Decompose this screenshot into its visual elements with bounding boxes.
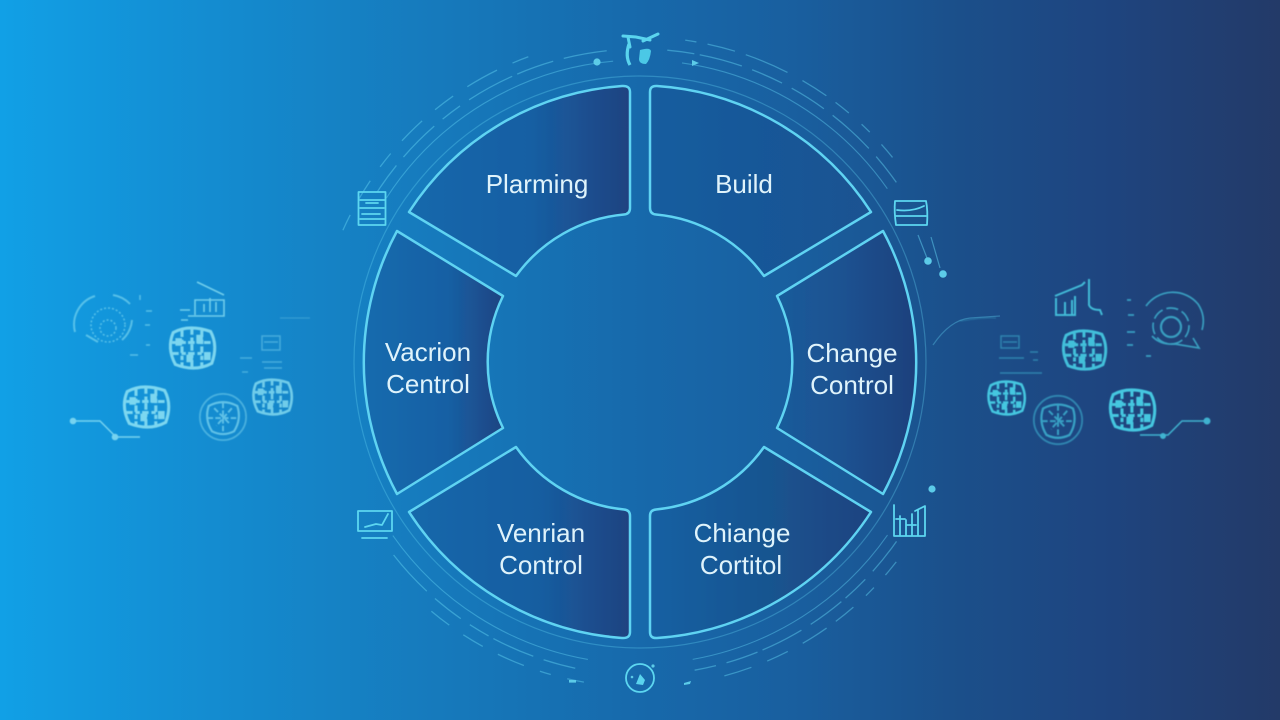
icon: document, upper left — [358, 192, 386, 225]
label: right Change Control: Control — [810, 370, 894, 400]
panel: bottom Change Control — [650, 447, 871, 638]
connector with dots — [1140, 418, 1210, 438]
label: left Version Control: Vacrion — [385, 337, 471, 367]
icon: head circle — [1034, 396, 1082, 444]
icon: target spiral — [1127, 292, 1203, 356]
icon: circuit blob lower left — [124, 387, 169, 427]
icon: top emblem — [623, 34, 658, 65]
faint dash — [280, 317, 310, 319]
connector with dots — [70, 418, 140, 440]
icon: head circle — [200, 394, 246, 440]
label: left Version Control: Centrol — [386, 369, 470, 399]
icon: bar chart — [180, 282, 224, 320]
icon: bar chart, lower right — [894, 505, 925, 536]
panel: Planning — [409, 86, 630, 276]
connector: right ring to cluster — [933, 316, 1000, 345]
label: bottom Change Control: Chiange — [694, 518, 790, 548]
icon: circuit blob lower left — [988, 382, 1025, 414]
label: Build: Build — [715, 169, 773, 199]
icon: circuit blob upper — [170, 328, 215, 368]
label: bottom Version Control: Control — [499, 550, 583, 580]
icon: circuit blob right — [1110, 390, 1155, 430]
icon: stack, upper right — [895, 201, 927, 225]
icon: faint document — [999, 336, 1042, 373]
icon: circuit blob upper — [1063, 331, 1106, 369]
outer decorative rings — [315, 37, 965, 687]
panel: right Change Control — [777, 231, 916, 494]
icon: bottom dash marks — [569, 680, 691, 685]
icon: monitor, lower left — [358, 511, 392, 538]
icon: bottom emblem — [626, 664, 655, 692]
label: Planning: Plarming — [486, 169, 588, 199]
panel: Build — [650, 86, 871, 276]
icon cluster: left — [70, 282, 310, 440]
icon: faint document — [240, 336, 282, 372]
label: right Change Control: Change — [806, 338, 898, 368]
label: bottom Version Control: Venrian — [497, 518, 585, 548]
label: bottom Change Control: Cortitol — [700, 550, 782, 580]
icon: top dots — [593, 58, 699, 66]
icon: target circle — [74, 295, 152, 355]
panel: bottom Version Control — [409, 447, 630, 638]
icon: lower right dot — [928, 485, 936, 493]
icon: right dots — [918, 235, 947, 278]
icon: circuit blob right — [253, 380, 292, 414]
icon cluster: right — [960, 279, 1210, 444]
icon: bar chart — [1055, 279, 1102, 315]
faint dash — [960, 318, 996, 321]
panel: left Version Control — [364, 231, 503, 494]
